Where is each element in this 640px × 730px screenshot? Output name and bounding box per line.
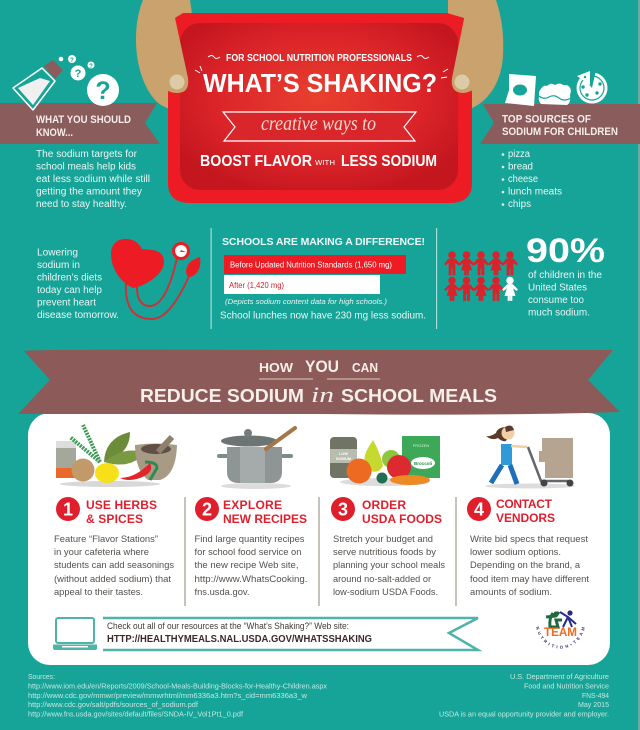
- body: (without added sodium) that: [54, 574, 171, 585]
- body: low-sodium USDA Foods.: [333, 587, 438, 598]
- heading: EXPLORE: [223, 498, 282, 512]
- panel: schools are making a difference: [220, 236, 426, 322]
- icon: herbs and spices: [56, 425, 177, 487]
- text block: United States: [528, 282, 587, 294]
- big number: 90%: [526, 232, 605, 270]
- illustration: hands behind tray: [136, 0, 503, 110]
- agency credits: Food and Nutrition Service: [524, 682, 609, 690]
- banner line one: [259, 357, 378, 376]
- body: for school food service on: [194, 547, 302, 558]
- heading: USDA FOODS: [362, 512, 442, 526]
- text block: children’s diets: [37, 272, 102, 284]
- tray kicker: FOR SCHOOL NUTRITION PROFESSIONALS: [226, 53, 412, 64]
- body: food item may have different: [470, 574, 589, 585]
- tray inner: [180, 23, 458, 190]
- flourishes: [195, 56, 448, 78]
- bullet list: bread: [508, 162, 533, 172]
- icon: low sodium foods: [330, 436, 440, 486]
- heading: WHAT YOU SHOULD: [36, 114, 131, 126]
- sources: Sources:: [28, 672, 55, 681]
- number badge: 2: [202, 500, 212, 520]
- number badge: 3: [338, 500, 348, 520]
- boost flavor line: LESS SODIUM: [341, 153, 437, 170]
- banner line two: SCHOOL MEALS: [341, 385, 497, 406]
- boost flavor line: [200, 153, 437, 170]
- banner: how you can reduce sodium: [18, 350, 620, 415]
- panel: what you should know: [0, 55, 160, 210]
- agency credits: U.S. Department of Agriculture: [510, 672, 609, 681]
- body: http://www.WhatsCooking.: [194, 574, 308, 585]
- icon: low sodium foods: Broccoli: [414, 461, 432, 466]
- agency credits: May 2015: [578, 700, 609, 709]
- panel: step 4 contact vendors: [467, 426, 589, 598]
- panel: red tray title: [152, 10, 490, 203]
- heading: [362, 498, 442, 526]
- panel: heart health: [37, 239, 200, 321]
- icon: salt shaker and question marks: ?: [89, 64, 93, 70]
- heading: KNOW...: [36, 127, 73, 139]
- number badge: 1: [63, 500, 73, 520]
- icon: low sodium foods: SODIUM: [336, 457, 351, 461]
- agency credits: [439, 672, 609, 718]
- heading: [502, 114, 618, 138]
- bar chart: After (1,420 mg): [229, 281, 284, 290]
- heading: & SPICES: [86, 512, 143, 526]
- logo: team nutrition: TEAM: [544, 625, 577, 639]
- summary: School lunches now have 230 mg less sodium.: [220, 310, 426, 322]
- chart note: (Depicts sodium content data for high schools.): [225, 297, 388, 306]
- divider: right: [436, 228, 437, 329]
- logo: team nutrition: [536, 610, 585, 649]
- icon: woman with hand truck: [485, 426, 575, 488]
- sources: http://www.cdc.gov/salt/pdfs/sources_of_sodium.pdf: [28, 700, 199, 709]
- body: Find large quantity recipes: [194, 534, 305, 545]
- heading: TOP SOURCES OF: [502, 114, 591, 126]
- banner line one: YOU: [305, 357, 339, 376]
- number badge: [195, 497, 219, 521]
- text block: today can help: [37, 285, 102, 296]
- heading: SODIUM FOR CHILDREN: [502, 126, 618, 138]
- sources: http://www.cdc.gov/mmwr/preview/mmwrhtml/mm6336a3.htm?s_cid=mm6336a3_w: [28, 691, 308, 700]
- bar chart: [224, 255, 406, 294]
- text block: consume too: [528, 295, 584, 306]
- banner line one: HOW: [259, 360, 294, 375]
- main title: WHAT’S SHAKING?: [203, 68, 437, 98]
- subtitle ribbon: [223, 112, 416, 141]
- body: [194, 534, 308, 598]
- number badge: [331, 497, 355, 521]
- icon: chip bag, sandwich, pizza: [505, 70, 608, 106]
- heading: [36, 114, 131, 139]
- bullet list: cheese: [508, 174, 538, 185]
- body: [333, 534, 445, 598]
- number badge: 4: [474, 500, 484, 520]
- icon: people pictogram: [444, 252, 518, 300]
- thumbs: [152, 10, 490, 93]
- number badge: [56, 497, 80, 521]
- number badge: [467, 497, 491, 521]
- body: [54, 534, 174, 598]
- ribbon: [480, 104, 640, 144]
- sources: [28, 672, 327, 718]
- callout text: Check out all of our resources at the “What’s Shaking?” Web site:: [107, 621, 349, 631]
- heading: [223, 498, 307, 526]
- icon: cooking pot: [217, 428, 295, 489]
- heading: ORDER: [362, 498, 406, 512]
- sources: http://www.fns.usda.gov/sites/default/files/SNDA-IV_Vol1Pt1_0.pdf: [28, 710, 244, 718]
- text block: disease tomorrow.: [37, 310, 119, 321]
- panel: top sources of sodium: [480, 70, 640, 210]
- boost flavor line: WITH: [315, 160, 335, 167]
- callout url: HTTP://HEALTHYMEALS.NAL.USDA.GOV/WHATSSHAKING: [107, 633, 372, 645]
- tray body: [168, 13, 472, 203]
- body: appeal to their tastes.: [54, 587, 143, 598]
- body: planning your school meals: [333, 560, 445, 571]
- icon: salt shaker and question marks: [13, 55, 119, 110]
- divider: left: [210, 228, 212, 329]
- icon: salt shaker and question marks: ?: [95, 77, 111, 105]
- panel: white content card: [28, 413, 610, 665]
- body text: The sodium targets for: [36, 149, 138, 160]
- body: around no-salt-added or: [333, 574, 431, 585]
- body text: [36, 149, 150, 210]
- body: Feature “Flavor Stations”: [54, 534, 158, 545]
- body text: eat less sodium while still: [36, 174, 150, 185]
- text block: of children in the: [528, 270, 602, 281]
- panel: step 1 herbs and spices: [54, 425, 177, 598]
- heading: CONTACT: [496, 497, 553, 511]
- text block: sodium in: [37, 260, 80, 271]
- heading: SCHOOLS ARE MAKING A DIFFERENCE!: [222, 236, 425, 248]
- text block: Lowering: [37, 248, 78, 258]
- sources: http://www.iom.edu/en/Reports/2009/School-Meals-Building-Blocks-for-Healthy-Children.aspx: [28, 682, 327, 690]
- heading: USE HERBS: [86, 498, 157, 512]
- heading: NEW RECIPES: [223, 512, 307, 526]
- banner line one: CAN: [352, 360, 378, 375]
- body text: school meals help kids: [36, 162, 136, 172]
- banner line two: in: [311, 382, 334, 407]
- bar chart: Before Updated Nutrition Standards (1,650 mg): [230, 260, 392, 270]
- agency credits: USDA is an equal opportunity provider and employer.: [439, 710, 609, 718]
- banner line two: [140, 382, 497, 407]
- body: serve nutritious foods by: [333, 547, 436, 558]
- heading: VENDORS: [496, 511, 555, 525]
- body: Depending on the brand, a: [470, 560, 581, 571]
- body: the new recipe Web site,: [194, 560, 298, 571]
- bullet list: pizza: [508, 149, 530, 160]
- icon: low sodium foods: FROZEN: [413, 443, 429, 448]
- panel: 90 percent statistic: [444, 232, 605, 318]
- panel: step 2 explore new recipes: [194, 428, 308, 598]
- bullet list: lunch meats: [508, 186, 562, 198]
- body: in your cafeteria where: [54, 547, 149, 558]
- panel: step 3 order usda foods: [330, 436, 445, 598]
- icon: salt shaker and question marks: ?: [70, 58, 74, 64]
- body text: need to stay healthy.: [36, 199, 127, 210]
- icon: heart and blood pressure cuff: [111, 239, 200, 319]
- column dividers: [185, 497, 456, 606]
- icon: laptop: [53, 618, 97, 650]
- heading: [86, 498, 157, 526]
- agency credits: FNS-494: [582, 691, 609, 700]
- thumbnails: [170, 74, 184, 90]
- text block: [37, 248, 119, 321]
- body text: getting the amount they: [36, 186, 142, 198]
- icon: salt shaker and question marks: ?: [75, 68, 82, 80]
- icon: low sodium foods: LOW: [339, 452, 348, 456]
- ribbon outline: [103, 618, 478, 650]
- callout: website link: [53, 618, 478, 650]
- body: [470, 534, 589, 598]
- body: amounts of sodium.: [470, 587, 552, 598]
- body: students can add seasonings: [54, 560, 174, 571]
- body: fns.usda.gov.: [194, 587, 250, 598]
- text block: [528, 270, 602, 318]
- logo: team nutrition: NUTRITION•TEAM: [536, 626, 585, 649]
- banner line two: REDUCE SODIUM: [140, 385, 304, 406]
- body: Write bid specs that request: [470, 534, 588, 545]
- text block: much sodium.: [528, 308, 590, 318]
- text block: prevent heart: [37, 298, 96, 308]
- body: Stretch your budget and: [333, 534, 433, 545]
- bullet list: [502, 149, 562, 210]
- heading: [496, 497, 555, 525]
- boost flavor line: BOOST FLAVOR: [200, 153, 312, 170]
- bullet list: chips: [508, 199, 531, 210]
- ribbon: [0, 103, 160, 144]
- subtitle: creative ways to: [261, 113, 376, 135]
- body: lower sodium options.: [470, 547, 561, 558]
